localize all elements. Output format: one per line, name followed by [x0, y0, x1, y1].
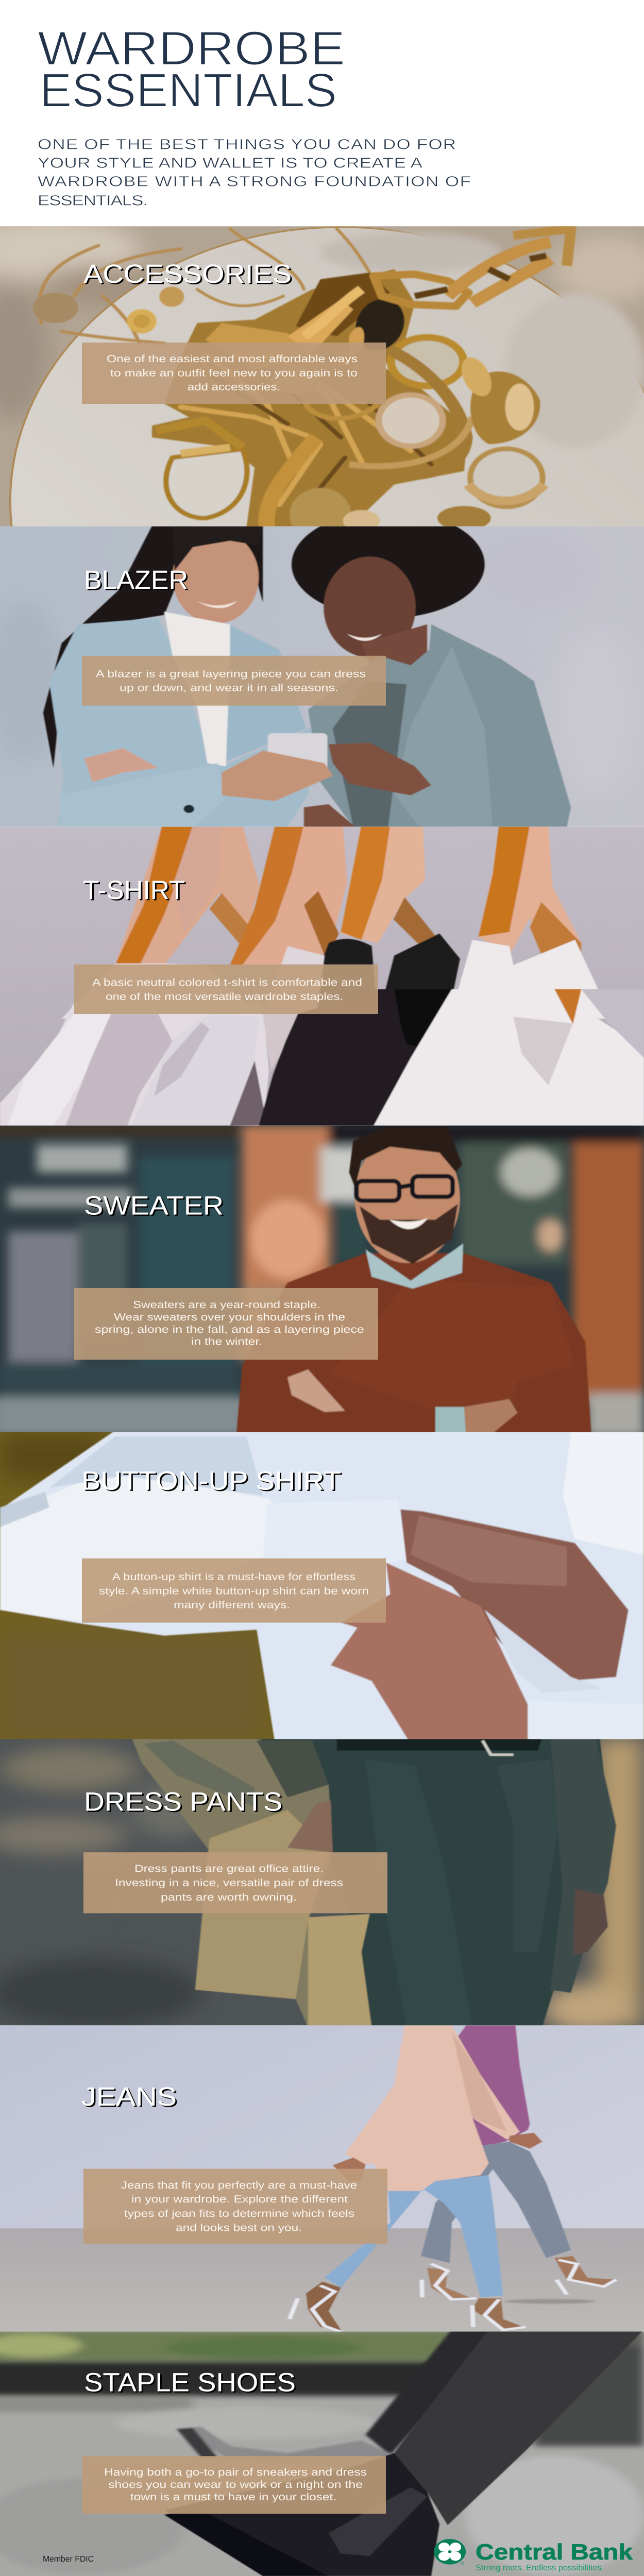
photo: black leather boot and dark jeans — [0, 2330, 644, 2576]
title: ESSENTIALS — [40, 63, 337, 117]
body text: jeans — [121, 2179, 357, 2233]
body text: dress pants — [115, 1863, 343, 1903]
body text: dress pants: Investing in a nice, versatile pair of dress — [115, 1877, 343, 1889]
heading: staple shoes: STAPLE SHOES — [84, 2367, 296, 2397]
body text: blazer — [96, 668, 366, 693]
logo: Central Bank: ® — [461, 2562, 465, 2566]
body text: dress pants: Dress pants are great office attire. — [134, 1863, 324, 1874]
body text: staple shoes: Having both a go-to pair of sneakers and dress — [104, 2466, 367, 2478]
heading: sweater: SWEATER — [84, 1191, 224, 1221]
body text: button-up shirt — [99, 1571, 369, 1611]
panel: dress pants — [0, 1737, 644, 2034]
panel: button-up shirt — [0, 1429, 644, 1752]
title: WARDROBE — [38, 22, 345, 75]
body text: sweater: Wear sweaters over your shoulders in the — [114, 1312, 345, 1323]
body text: accessories: to make an outfit feel new to you again is to — [110, 367, 358, 379]
photo: gold jewelry on a white plate — [0, 226, 644, 527]
logo: Central Bank: Central Bank — [476, 2540, 633, 2565]
body text: staple shoes: town is a must to have in your closet. — [130, 2491, 336, 2503]
heading: t-shirt: T-SHIRT — [83, 875, 185, 905]
body text: accessories: One of the easiest and most affordable ways — [107, 353, 358, 365]
heading: accessories: ACCESSORIES — [83, 259, 292, 289]
photo: white shirt cuff and hands — [0, 1429, 644, 1752]
logo: Central Bank: Strong roots. Endless possibilities. — [476, 2563, 604, 2572]
intro text: ONE OF THE BEST THINGS YOU CAN DO FOR — [38, 136, 456, 152]
body text: staple shoes: shoes you can wear to work or a night on the — [108, 2479, 363, 2490]
title — [38, 22, 345, 117]
heading: blazer: BLAZER — [84, 565, 188, 595]
text box: blazer — [82, 656, 386, 706]
body text: button-up shirt: style. A simple white button-up shirt can be worn — [99, 1585, 369, 1597]
body text: dress pants: pants are worth owning. — [161, 1891, 297, 1903]
intro text: YOUR STYLE AND WALLET IS TO CREATE A — [38, 155, 423, 171]
body text: jeans: Jeans that fit you perfectly are a must-have — [121, 2179, 357, 2191]
panel: blazer — [0, 511, 644, 829]
photo: green pleated dress pants and jacket — [0, 1737, 644, 2034]
text box: sweater — [74, 1288, 378, 1360]
intro text: WARDROBE WITH A STRONG FOUNDATION OF — [38, 174, 471, 190]
text box: staple shoes — [82, 2456, 386, 2514]
intro text: ESSENTIALS. — [38, 193, 148, 209]
photo: couple walking in jeans and heels — [0, 2025, 644, 2333]
panel: sweater — [0, 1121, 644, 1436]
footer: member FDIC: Member FDIC — [43, 2554, 94, 2564]
icon: clover emblem — [434, 2539, 466, 2565]
body text: jeans: types of jean fits to determine which feels — [124, 2208, 354, 2219]
body text: jeans: and looks best on you. — [176, 2222, 302, 2233]
photo: two women in blazers with a phone — [0, 511, 644, 829]
body text: t-shirt: A basic neutral colored t-shirt is comfortable and — [92, 977, 362, 988]
heading: button-up shirt: BUTTON-UP SHIRT — [81, 1466, 341, 1496]
panel: staple shoes — [0, 2330, 644, 2576]
body text: sweater — [95, 1299, 364, 1347]
body text: staple shoes — [104, 2466, 367, 2503]
body text: blazer: up or down, and wear it in all seasons. — [120, 682, 338, 693]
body text: jeans: in your wardrobe. Explore the different — [131, 2194, 348, 2205]
body text: sweater: Sweaters are a year-round staple. — [133, 1299, 320, 1311]
body text: accessories — [107, 353, 358, 393]
heading: dress pants: DRESS PANTS — [84, 1787, 282, 1817]
body text: t-shirt: one of the most versatile wardrobe staples. — [106, 991, 343, 1003]
panel: t-shirt — [0, 825, 644, 1126]
heading: jeans: JEANS — [81, 2082, 177, 2111]
body text: sweater: spring, alone in the fall, and as a layering piece — [95, 1324, 364, 1335]
text box: jeans — [83, 2169, 387, 2244]
text box: t-shirt — [74, 964, 378, 1014]
intro text — [38, 136, 471, 209]
photo: smiling man in rust sweater — [0, 1121, 644, 1436]
body text: button-up shirt: many different ways. — [174, 1599, 290, 1611]
panel: jeans — [0, 2025, 644, 2333]
body text: accessories: add accessories. — [188, 381, 280, 393]
body text: blazer: A blazer is a great layering piece you can dress — [96, 668, 366, 680]
logo: Central Bank — [434, 2539, 633, 2572]
photo: shirts on wooden hangers — [0, 825, 644, 1126]
text box: dress pants — [83, 1852, 387, 1913]
body text: sweater: in the winter. — [191, 1336, 262, 1347]
body text: t-shirt — [92, 977, 362, 1003]
body text: button-up shirt: A button-up shirt is a must-have for effortless — [112, 1571, 355, 1583]
panel: accessories — [0, 226, 644, 527]
text box: accessories — [82, 343, 386, 404]
text box: button-up shirt — [82, 1558, 386, 1623]
